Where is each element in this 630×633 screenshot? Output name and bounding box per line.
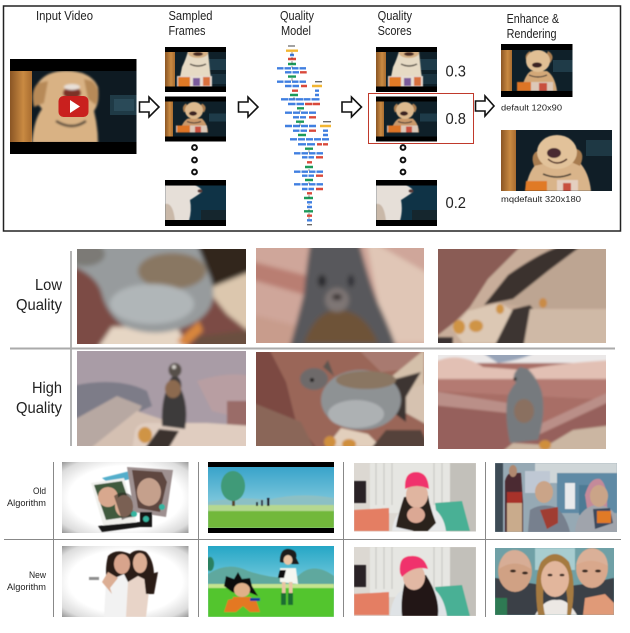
photo: high quality canyon view [77, 351, 246, 446]
thumbnail: new vlogger close-up [354, 547, 476, 616]
heading: input video: Input Video [36, 9, 93, 23]
score: 0.8: 0.8 [446, 111, 466, 128]
photo: high quality side profile [256, 352, 424, 446]
heading: enhance and rendering [507, 12, 560, 41]
caption: mqdefault: mqdefault 320x180 [501, 194, 581, 204]
ellipsis dots [192, 145, 197, 174]
label: high quality [16, 380, 62, 417]
label: low quality [16, 277, 62, 314]
thumbnail: new two women [62, 546, 188, 617]
label: new algorithm: New [29, 570, 46, 581]
heading: sampled frames: Sampled [168, 9, 213, 23]
scored frames [376, 47, 437, 226]
heading: quality model: Model [281, 24, 311, 38]
photo: low quality close-up body [77, 249, 246, 344]
horizontal divider [10, 348, 615, 350]
heading: quality scores: Scores [378, 24, 412, 38]
icon: play button [58, 96, 88, 117]
photo: high quality upright squirrel [438, 355, 606, 449]
heading: enhance and rendering: Enhance & [507, 12, 560, 26]
thumbnail: old collage [62, 462, 188, 533]
label: low quality: Quality [16, 297, 62, 314]
panel: old vs new algorithm comparison [4, 462, 621, 617]
arrow: model to scores [342, 97, 362, 117]
highlight box: best frame [368, 94, 474, 144]
arrow: frames to model [238, 97, 258, 117]
heading: quality scores [378, 9, 413, 38]
thumbnail: old hospital scene [495, 463, 617, 532]
photo: low quality rocks only [438, 249, 606, 343]
output thumbnail: mqdefault [501, 130, 612, 191]
heading: quality scores: Quality [378, 9, 413, 23]
label: old algorithm [7, 486, 46, 509]
thumbnail: new three faces [495, 548, 614, 615]
label: high quality: Quality [16, 400, 62, 417]
panel: squirrel quality comparison [10, 238, 615, 455]
caption: default: default 120x90 [501, 102, 562, 112]
vertical divider [70, 251, 72, 446]
label: new algorithm: Algorithm [7, 582, 46, 593]
label: old algorithm: Algorithm [7, 498, 46, 509]
heading: quality model: Quality [280, 9, 315, 23]
thumbnail: new cartoon characters [208, 546, 334, 617]
thumbnail: old cartoon landscape [208, 462, 334, 533]
pipeline panel [4, 6, 620, 231]
heading: sampled frames [168, 9, 213, 38]
label: high quality: High [32, 380, 62, 397]
heading: quality model [280, 9, 315, 38]
heading: enhance and rendering: Rendering [507, 27, 557, 41]
grid lines [4, 462, 621, 617]
neural network diagram [277, 46, 331, 225]
arrow: scores to rendering [476, 96, 494, 116]
score: 0.3: 0.3 [446, 64, 466, 80]
label: new algorithm [7, 570, 46, 593]
heading: sampled frames: Frames [168, 24, 206, 38]
arrow: video to frames [140, 97, 159, 117]
sampled frames [165, 47, 226, 226]
thumbnail: old vlogger gesturing [354, 463, 476, 532]
input video thumbnail [10, 59, 136, 154]
output thumbnail: default [501, 44, 572, 97]
photo: low quality blurred face [256, 248, 424, 343]
label: old algorithm: Old [33, 486, 46, 497]
ellipsis dots [401, 145, 405, 174]
score: 0.2: 0.2 [446, 195, 466, 212]
label: low quality: Low [35, 277, 62, 294]
